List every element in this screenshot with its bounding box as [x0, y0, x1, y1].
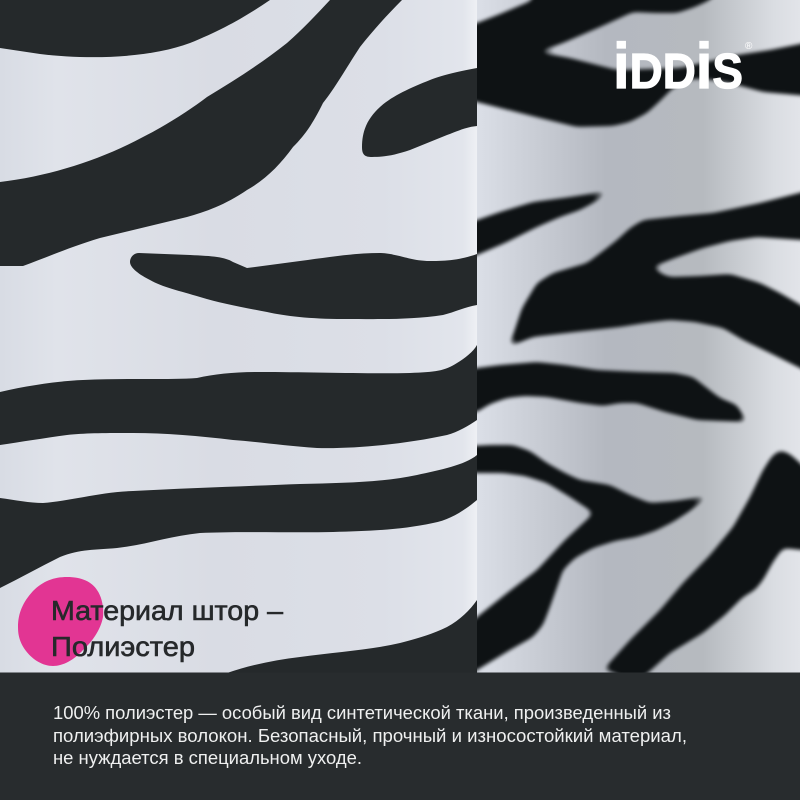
- text block: description: 100% полиэстер — особый вид синтетической ткани, произведенный из: [53, 703, 671, 723]
- accent: pink blob behind heading: [18, 577, 103, 666]
- heading: material title: Материал штор –: [51, 595, 283, 626]
- panel: left sharp curtain fabric: [0, 0, 477, 673]
- logo: IDDIS wordmark: iDDiS: [613, 30, 743, 102]
- text block: description: не нуждается в специальном уходе.: [53, 748, 362, 768]
- text block: description: [53, 703, 687, 768]
- footer band: [0, 672, 800, 800]
- text block: description: полиэфирных волокон. Безопасный, прочный и износостойкий материал,: [53, 726, 687, 746]
- heading: material title: [51, 595, 283, 662]
- panel: right blurred curtain fabric: [477, 0, 800, 672]
- logo: IDDIS wordmark: ®: [745, 41, 753, 52]
- heading: material title: Полиэстер: [51, 631, 195, 662]
